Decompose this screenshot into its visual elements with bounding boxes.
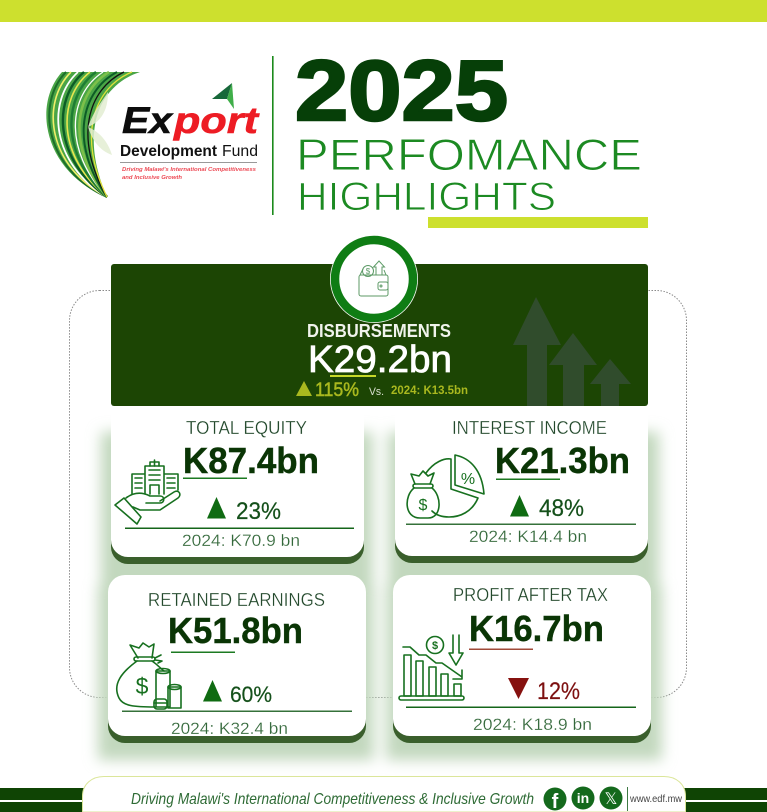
logo wordmark: port bbox=[173, 100, 260, 141]
logo wordmark bbox=[122, 100, 260, 141]
card: profit after tax: $ bbox=[432, 640, 438, 652]
value: K51.8bn bbox=[168, 610, 303, 651]
prior year: 2024: K32.4 bn bbox=[171, 719, 288, 738]
change: 115% bbox=[315, 380, 359, 401]
card: interest income: % bbox=[461, 471, 475, 488]
icon: facebook bbox=[544, 788, 566, 812]
logo swoosh bbox=[46, 72, 140, 197]
prior year: 2024: K13.5bn bbox=[391, 385, 468, 397]
footer tagline: Driving Malawi's International Competitiveness & Inclusive Growth bbox=[131, 791, 534, 808]
heading: PROFIT AFTER TAX bbox=[453, 585, 608, 605]
card: profit after tax: 12% bbox=[537, 678, 580, 705]
prior year: 2024: K14.4 bn bbox=[469, 527, 587, 546]
icon: wallet badge: $ bbox=[366, 267, 371, 276]
footer bands bbox=[0, 788, 767, 812]
card: retained earnings bbox=[108, 575, 366, 743]
heading: DISBURSEMENTS bbox=[307, 321, 451, 341]
logo subtitle: Fund bbox=[222, 143, 258, 160]
card: total equity: 23% bbox=[236, 498, 281, 525]
header divider bbox=[272, 56, 274, 215]
heading: RETAINED EARNINGS bbox=[148, 590, 325, 610]
versus: Vs. bbox=[369, 386, 384, 398]
logo wordmark: Ex bbox=[122, 100, 174, 141]
title: HIGHLIGHTS bbox=[297, 175, 556, 219]
top bar bbox=[0, 0, 767, 22]
card: interest income: 48% bbox=[539, 495, 584, 522]
icon: wallet badge bbox=[330, 235, 418, 323]
change bbox=[207, 497, 226, 518]
logo arrow bbox=[212, 83, 234, 109]
title: 2025 bbox=[295, 44, 508, 139]
icon: money bag and pie bbox=[407, 455, 484, 518]
card: retained earnings: 60% bbox=[230, 682, 272, 707]
icon: background arrows bbox=[513, 297, 631, 406]
icon: hand holding buildings bbox=[115, 460, 180, 524]
logo tagline: Driving Malawi's International Competitiveness bbox=[122, 167, 256, 173]
logo bbox=[46, 72, 260, 197]
title: PERFOMANCE bbox=[296, 131, 642, 180]
change bbox=[508, 678, 529, 699]
logo subtitle: Development bbox=[120, 143, 217, 160]
logo tagline: and Inclusive Growth bbox=[122, 175, 183, 181]
dotted frame bbox=[70, 290, 686, 698]
dark panel: disbursements bbox=[111, 235, 648, 406]
icon: x bbox=[600, 786, 622, 810]
icon: linkedin bbox=[572, 786, 594, 810]
footer pill bbox=[82, 776, 686, 812]
change bbox=[510, 495, 529, 516]
value: K21.3bn bbox=[495, 440, 630, 481]
title accent bar bbox=[428, 217, 648, 228]
change bbox=[203, 680, 222, 702]
card: profit after tax bbox=[393, 575, 651, 743]
logo leaf bbox=[88, 92, 112, 155]
card shadows bbox=[98, 432, 662, 760]
card: total equity bbox=[111, 400, 364, 564]
icon: declining bar chart bbox=[399, 635, 464, 700]
prior year: 2024: K18.9 bn bbox=[473, 715, 592, 734]
card: retained earnings: $ bbox=[136, 673, 149, 699]
icon: linkedin: in bbox=[577, 790, 589, 806]
card: interest income bbox=[395, 400, 648, 563]
prior year: 2024: K70.9 bn bbox=[182, 531, 300, 550]
logo tagline bbox=[122, 167, 256, 181]
website: www.edf.mw bbox=[629, 794, 683, 805]
card: interest income: $ bbox=[419, 497, 428, 514]
heading: TOTAL EQUITY bbox=[186, 418, 307, 438]
change bbox=[296, 380, 359, 401]
icon: money bag and coins bbox=[117, 643, 181, 709]
value: K87.4bn bbox=[183, 440, 319, 481]
value: K29.2bn bbox=[308, 339, 452, 381]
icon: x: 𝕏 bbox=[605, 791, 618, 808]
heading: INTEREST INCOME bbox=[452, 418, 607, 438]
value: K16.7bn bbox=[469, 608, 604, 649]
title bbox=[295, 44, 642, 219]
